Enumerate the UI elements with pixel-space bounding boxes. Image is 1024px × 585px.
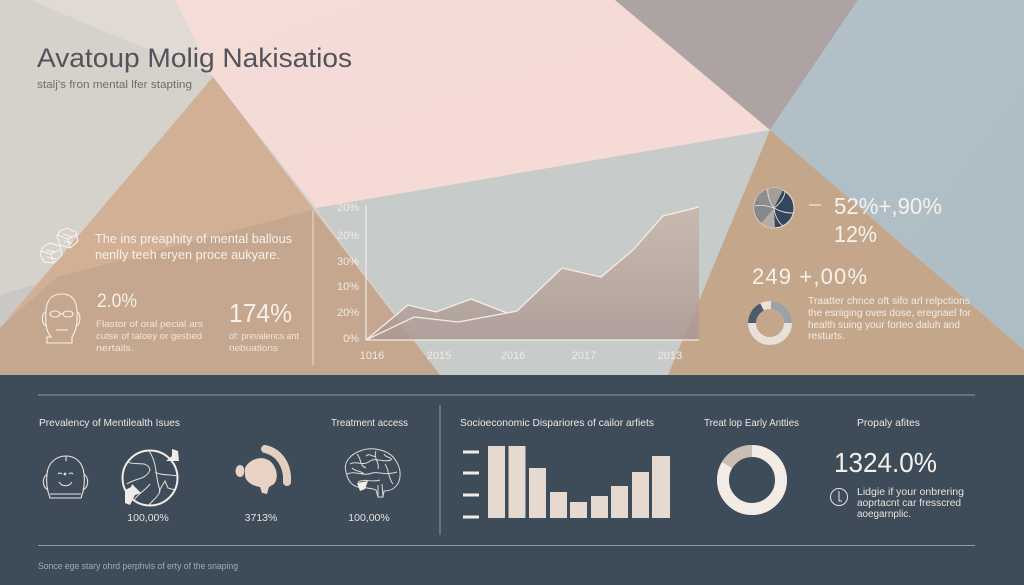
value: 100,00%: 100,00% bbox=[127, 512, 169, 524]
x-axis labels bbox=[360, 350, 682, 362]
stat: 52% +,90%: 52%+,90% bbox=[834, 193, 942, 219]
note text bbox=[857, 487, 964, 520]
y-axis labels: 0% bbox=[343, 333, 359, 345]
value: 100,00%: 100,00% bbox=[348, 512, 390, 524]
x-axis labels: 2015 bbox=[427, 350, 451, 362]
intro text: nenlly teeh eryen proce aukyare. bbox=[95, 247, 280, 262]
y-axis labels: 30% bbox=[337, 256, 359, 268]
icon: brain outline bbox=[345, 449, 400, 497]
y-axis labels: 20% bbox=[337, 307, 359, 319]
heading: treat early: Treat lop Early Antties bbox=[704, 417, 799, 429]
stat 174% description bbox=[229, 331, 299, 354]
bar chart bbox=[463, 446, 670, 518]
heading: propaly afites: Propaly afites bbox=[857, 417, 920, 429]
icon: brain globe with arrows bbox=[122, 449, 179, 506]
heading: socioeconomic disparities: Socioeconomic Dispariores of cailor arfiets bbox=[460, 417, 654, 429]
x-axis labels: 2013 bbox=[658, 350, 682, 362]
stat: 249 +,00%: 249 +,00% bbox=[752, 264, 867, 289]
donut chart bbox=[723, 451, 781, 509]
description text: health suing your forteo daluh and bbox=[808, 320, 960, 331]
description text: resturts. bbox=[808, 331, 845, 342]
heading: treatment access: Treatment access bbox=[331, 417, 408, 429]
note text: aoegarnplic. bbox=[857, 509, 911, 520]
line chart bbox=[313, 202, 699, 365]
intro text: The ins preaphity of mental ballous bbox=[95, 231, 292, 246]
note text: aoprtacnt car fresscred bbox=[857, 498, 961, 509]
subtitle: stalj's fron mental lfer stapting bbox=[37, 79, 192, 91]
icon: ring chart bbox=[752, 305, 788, 341]
main data line bbox=[366, 207, 699, 340]
source note: Sonce ege stary ohrd perphvis of erty of the snaping bbox=[38, 561, 238, 571]
panel: right statistics bbox=[752, 188, 972, 342]
note text: Lidgie if your onbrering bbox=[857, 487, 964, 498]
title: Avatoup Molig Nakisatios bbox=[37, 43, 352, 73]
panel: bottom band bbox=[0, 375, 1024, 585]
intro text bbox=[95, 231, 292, 262]
stat description: nertails. bbox=[96, 343, 134, 354]
axis ticks bbox=[463, 452, 479, 517]
stat description: cutse of taloey or gesbed bbox=[96, 331, 202, 342]
description text: the esriiging oves dose, eregnael for bbox=[808, 308, 972, 319]
heading: prevalency: Prevalency of Mentilealth Isues bbox=[39, 417, 180, 429]
icon: clock bbox=[830, 488, 848, 506]
dash bbox=[809, 204, 821, 206]
description text: Traatter chnce oft sifo arl relpctions bbox=[808, 296, 970, 307]
x-axis labels: 1016 bbox=[360, 350, 384, 362]
icon: head with glasses bbox=[42, 294, 80, 343]
description text bbox=[808, 296, 972, 342]
stat description: Flastor of oral pecial ars bbox=[96, 319, 203, 330]
stat: 174%: 174% bbox=[229, 298, 292, 328]
bars bbox=[488, 446, 670, 518]
icon: pie chart bbox=[754, 188, 794, 228]
x-axis labels: 2017 bbox=[572, 350, 596, 362]
y-axis labels: 20% bbox=[337, 202, 359, 214]
y-axis labels: 20% bbox=[337, 230, 359, 242]
y-axis labels: 10% bbox=[337, 281, 359, 293]
stat: 2.0%: 2.0% bbox=[97, 291, 137, 312]
chart area fill bbox=[366, 207, 699, 340]
geometric background bbox=[0, 0, 1024, 375]
upper data line bbox=[366, 299, 507, 340]
x-axis labels: 2016 bbox=[501, 350, 525, 362]
stat: 12%: 12% bbox=[834, 221, 877, 247]
icon: cubes bbox=[40, 228, 78, 263]
panel: left statistics bbox=[40, 228, 299, 354]
y-axis labels bbox=[337, 202, 359, 345]
stat 174% description: of: prevalencs ant bbox=[229, 331, 299, 342]
value: 3713%: 3713% bbox=[245, 512, 277, 524]
stat: 1324.0%: 1324.0% bbox=[834, 447, 937, 478]
stat description bbox=[96, 319, 203, 354]
icon: smiling face bbox=[43, 456, 88, 498]
stat 174% description: nebuations bbox=[229, 343, 278, 354]
icon: head profile with arc bbox=[236, 449, 287, 494]
